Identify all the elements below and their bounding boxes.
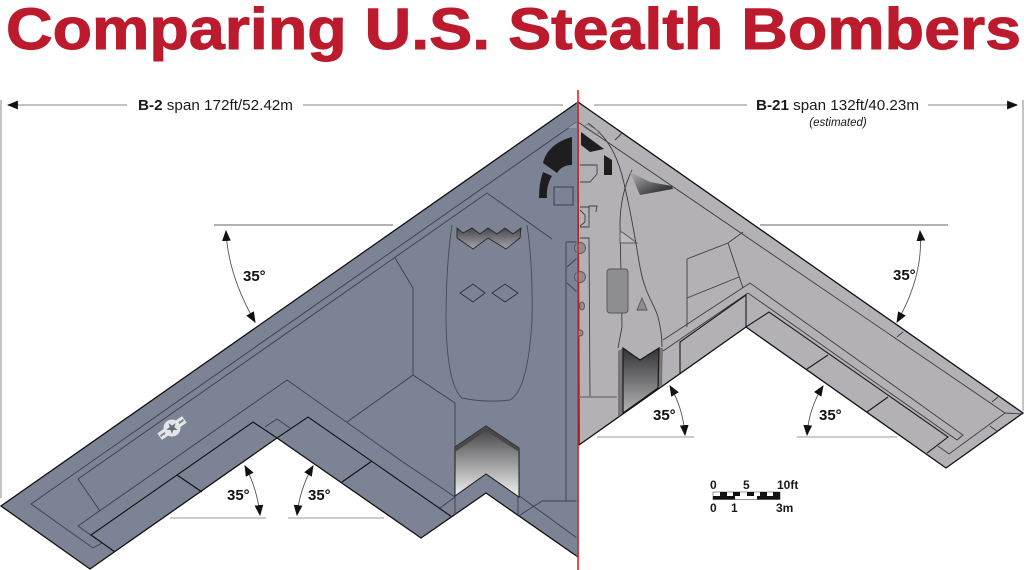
angle: B-2 notch right [288,466,384,518]
scale bar: 0 [710,501,717,515]
scale bar: 3m [776,501,793,515]
B-2 panel lines [31,122,577,548]
B-21 avionics markers [574,232,647,336]
center divider line [577,90,578,570]
scale bar: 5 [743,478,750,492]
B-21 span dimension: (estimated) [809,117,867,129]
angle: B-21 notch right: 35° [819,407,842,424]
B-21 elevon lines [680,295,948,453]
B-21 bomber half [574,102,1023,468]
B-2 exhaust [455,426,519,497]
angle: B-21 leading edge: 35° [893,267,916,284]
B-21 cockpit windows [581,132,612,175]
B-21 wing outline [578,102,1023,468]
angle: B-2 notch right: 35° [308,487,331,504]
B-2 nose panel [568,122,577,128]
B-2 bomber half [1,102,578,569]
angle: B-2 notch left: 35° [227,487,250,504]
angle: B-21 notch left: 35° [653,407,676,424]
B-21 exhaust [618,348,663,417]
scale bar: 1 [731,501,738,515]
icon: US roundel [155,412,189,444]
scale bar: 10ft [777,478,798,492]
B-2 wing outline [1,102,578,569]
angle: B-21 notch left [597,386,694,437]
scale bar: 0 [710,478,717,492]
B-21 span dimension: B-21 span 132ft/40.23m [756,98,919,114]
B-2 diamonds [460,284,518,302]
scale bar [710,478,798,515]
B-2 central fuselage outline [446,225,532,401]
B-21 intake [630,172,673,195]
angle: B-21 notch right [797,386,897,437]
B-21 span dimension [594,98,1023,411]
B-2 intake [457,228,521,249]
B-2 elevon lines [91,417,452,552]
angle: B-2 notch left [170,466,266,518]
B-21 nose panel [584,124,600,135]
angle: B-21 leading edge [760,225,948,322]
B-2 cockpit windows [539,137,572,198]
angle: B-2 leading edge: 35° [243,268,266,285]
B-2 hatch [554,187,573,205]
angle: B-2 leading edge [214,225,393,322]
B-21 panel lines [578,122,1023,454]
B-2 span dimension: B-2 span 172ft/52.42m [138,98,293,114]
